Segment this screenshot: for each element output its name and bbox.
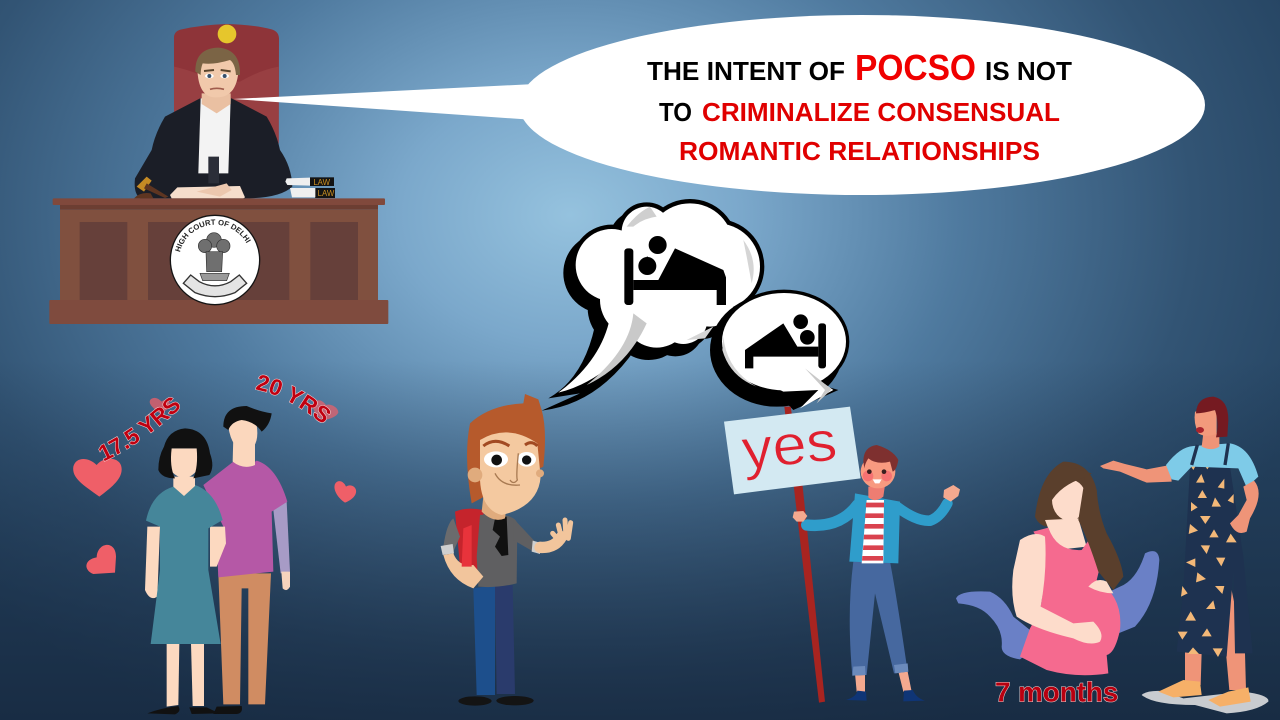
blue decorative cushion [956,551,1159,659]
sign pole [784,407,825,703]
small thought bubble [710,290,849,410]
motto ribbon [183,275,247,297]
woman in teal dress [145,428,226,714]
couple illustration [73,374,356,714]
bubble shape with tail pointing to judge [233,15,1205,195]
law books [285,177,335,198]
large thought bubble [542,203,760,411]
high court seal [170,214,260,306]
gavel [134,177,168,198]
quote text: IS NOT [985,56,1072,86]
torso with blue jacket and striped shirt [793,485,960,563]
high court seal: HIGH COURT OF DELHI [175,219,251,252]
scolding woman [1100,397,1259,690]
label: 17.5 YRS: 17.5 YRS [98,397,180,462]
yes sign: yes [739,410,840,482]
quote text: POCSO [855,47,976,88]
bench desk [49,198,388,324]
man in purple shirt [203,406,290,714]
speech bubble [233,15,1205,195]
judge at bench illustration [49,24,388,324]
shoes on floor [1158,680,1251,707]
law books: LAW [313,178,330,187]
label: 7 months: 7 months [995,677,1118,708]
quote text: TO [659,97,692,127]
quote text: ROMANTIC RELATIONSHIPS [679,136,1040,166]
floor shadow behind shoes [1142,691,1268,713]
shoes and legs [846,562,925,701]
hearts [73,398,356,574]
judge chair [174,24,279,143]
judge robe [135,98,292,198]
pregnant woman and scolding woman [956,397,1268,713]
thought bubbles and student [441,203,849,706]
yes sign [724,407,861,494]
emblem lions [198,233,230,281]
head [861,445,898,500]
judge head [195,48,240,113]
quote text [647,47,1072,166]
icon: bed with two people mirrored [745,314,826,368]
law books: LAW [318,189,335,198]
label: 20 YRS: 20 YRS [255,374,331,423]
man holding yes sign [724,407,960,703]
icon: bed with two people [624,236,726,305]
student with backpack [441,394,571,706]
quote text: CRIMINALIZE CONSENSUAL [702,97,1060,127]
pregnant woman [1012,462,1123,675]
quote text: THE INTENT OF [647,56,845,86]
